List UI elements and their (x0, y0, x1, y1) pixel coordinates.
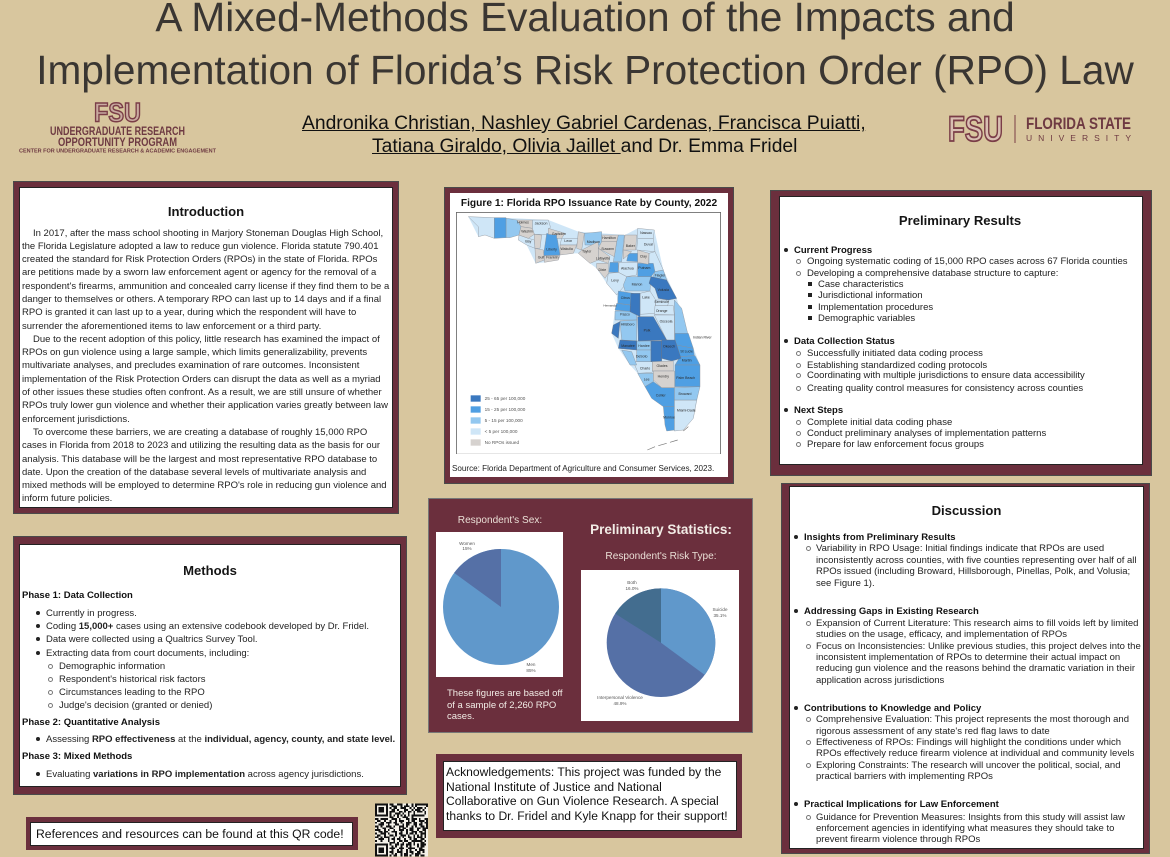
legend (471, 395, 526, 446)
panel: introduction (14, 182, 398, 513)
callout: references: References and resources can be found at this QR code! (36, 827, 344, 841)
list: practical implications for law enforcement (794, 798, 1125, 844)
title (36, 0, 1134, 93)
icon: QR code (375, 804, 428, 856)
county labels: Broward (678, 392, 692, 396)
text: phase 2: Phase 2: Quantitative Analysis (22, 716, 160, 728)
county labels: Gadsden (552, 232, 566, 236)
text: phase 3: Evaluating variations in RPO implementation across agency jurisdictions. (46, 768, 364, 780)
authors (302, 113, 866, 157)
list: data collection status: Creating quality control measures for consistency across counties (807, 382, 1083, 394)
list: data collection status: Data Collection Status (794, 336, 895, 346)
text: phase 1: Circumstances leading to the RPO (59, 686, 205, 698)
pie chart: respondent's sex: Women (459, 541, 475, 546)
county labels: St Lucie (680, 349, 693, 353)
county labels (517, 221, 712, 419)
county labels: Suwann (601, 247, 614, 251)
title: Implementation of Florida’s Risk Protection Order (RPO) Law (36, 47, 1134, 93)
county labels: Madison (587, 240, 600, 244)
list: insights from preliminary results: see Figure 1). (816, 578, 875, 588)
list: next steps: Complete initial data coding phase (807, 416, 952, 428)
county labels: Indian River (693, 336, 712, 340)
list: practical implications for law enforcement: prevent firearm violence through RPOs (816, 834, 980, 844)
text: phase 1: Currently in progress. (46, 608, 137, 618)
list: practical implications for law enforcement: Guidance for Prevention Measures: Insights from this study will assist law (816, 812, 1125, 822)
legend: No RPOs issued (485, 440, 519, 445)
list: next steps: Next Steps (794, 404, 843, 416)
list: insights from preliminary results: inconsistently across counties, with five counties representing over half of all (816, 554, 1137, 566)
heading: discussion: Discussion (932, 503, 1001, 518)
text: phase 1: Extracting data from court documents, including: (46, 648, 249, 658)
county labels: Hamilton (602, 236, 616, 240)
logo: FSU Undergraduate Research Opportunity Program (19, 98, 217, 155)
list: data collection status: Coordinating with multiple jurisdictions to ensure data accessibility (807, 370, 1085, 380)
list: practical implications for law enforcement: enforcement agencies in identifying what measures they should take to (816, 822, 1114, 834)
counties: 25 to 65 per 100,000 (612, 277, 681, 362)
list: addressing gaps in existing research: reducing gun violence and the reasons behind the dramatic variation in their (816, 662, 1135, 674)
state silhouette (468, 217, 700, 431)
logo: FSU Undergraduate Research Opportunity Program: CENTER FOR UNDERGRADUATE RESEARCH & ACADEMIC ENGAGEMENT (19, 149, 217, 155)
county labels: Duval (644, 243, 653, 247)
county labels: Palm Beach (676, 376, 695, 380)
county labels: Volusia (658, 288, 669, 292)
county labels: Orange (656, 309, 668, 313)
county labels: Martin (682, 359, 692, 363)
pie chart: respondent's risk type: 48.9% (613, 701, 627, 706)
florida keys (647, 427, 688, 450)
callout: references (26, 817, 358, 850)
heading: preliminary statistics: Preliminary Statistics: (590, 522, 732, 537)
county labels: Manatee (621, 344, 635, 348)
county labels: Monroe (663, 415, 675, 419)
list: addressing gaps in existing research: studies on the usage, efficacy, and implementation of RPOs (816, 628, 1067, 640)
county labels: DeSoto (636, 355, 648, 359)
list: current progress: Case characteristics (818, 278, 904, 290)
county labels: Jackson (535, 221, 547, 225)
text: phase 1: Demographic information (59, 660, 165, 672)
text: introduction body: In 2017, after the mass school shooting in Marjory Stoneman Douglas High School, the Florida Legislature adopted a law to reduce gun violence. Florida statute 790.401 created the standard for Risk Protection Orders (RPOs) in the state of Florida. RPOs are petitions made by a sworn law enforcement agent or agency for the removal of a respondent's firearms, ammunition and concealed carry license if they find them to be a danger to themselves or others. A temporary RPO can last up to 14 days and if a final RPO is granted it can last up to a year, during which the respondent will have to surrender the aforementioned items to law enforcement or a third party. Due to the recent adoption of this policy, little research has examined the impact of RPOs on gun violence using a large sample, which limits generalizability, prevents multivariate analyses, and precludes examination of rare outcomes. Inconsistent implementation of the Risk Protection Orders can disrupt the data as well as a myriad of other issues these studies often confront. As a result, we are still unsure of whether RPOs truly lower gun violence and whether their application varies greatly between law enforcement jurisdictions. To overcome these barriers, we are creating a database of roughly 15,000 RPO cases in Florida from 2018 to 2023 and utilizing the resulting data as the basis for our analysis. This database will be the largest and most representative RPO database to date. Upon the creation of the database several levels of multivariate analysis and mixed methods will be employed to determine RPO's role in reducing gun violence and inform future policies. (22, 228, 389, 504)
counties: 5 to 15 per 100,000 (506, 218, 700, 400)
list: current progress: Jurisdictional information (818, 290, 923, 300)
list: contributions to knowledge and policy: RPOs effectively reduce firearm violence at individual and community levels (816, 748, 1134, 758)
county labels: Hernando (603, 303, 617, 307)
list: insights from preliminary results: Insights from Preliminary Results (804, 532, 956, 542)
panel: methods (14, 537, 406, 794)
heading: preliminary results: Preliminary Results (899, 213, 1021, 228)
list: addressing gaps in existing research: Addressing Gaps in Existing Research (804, 606, 979, 616)
logo: FSU Undergraduate Research Opportunity Program: FSU (94, 98, 141, 128)
county labels: Miami-Dade (677, 409, 696, 413)
list: contributions to knowledge and policy: Comprehensive Evaluation: This project represents the most thorough and (816, 714, 1129, 724)
list: data collection status: Establishing standardized coding protocols (807, 360, 987, 370)
list: current progress: Demographic variables (818, 312, 915, 324)
text: phase 1: Coding 15,000+ cases using an extensive codebook developed by Dr. Fridel. (46, 620, 369, 632)
heading: introduction: Introduction (168, 204, 244, 219)
pie chart: respondent's sex: Men (527, 662, 536, 667)
pie chart: respondent's risk type: Interpersonal Violence (597, 695, 643, 700)
legend: 5 - 15 per 100,000 (485, 418, 523, 423)
logo: Florida State University: UNIVERSITY (1026, 133, 1131, 143)
heading: figure 1: Figure 1: Florida RPO Issuance Rate by County, 2022 (461, 198, 717, 208)
text: phase 1: Phase 1: Data Collection (22, 590, 133, 600)
list: contributions to knowledge and policy: Contributions to Knowledge and Policy (804, 702, 981, 714)
county labels: Hillsboro (621, 322, 635, 326)
list: addressing gaps in existing research: inconsistent implementation of RPOs to determine their actual impact on (816, 652, 1120, 662)
county labels: Collier (656, 394, 666, 398)
county labels: Washin (521, 230, 533, 234)
text: phase 1: Data were collected using a Qualtrics Survey Tool. (46, 634, 258, 644)
county labels: Nassau (640, 231, 652, 235)
list: data collection status: Successfully initiated data coding process (807, 348, 983, 358)
text: phase 1: Respondent's historical risk factors (59, 674, 206, 684)
list: data collection status (784, 336, 1085, 394)
counties: no RPOs issued (517, 220, 674, 388)
panel: discussion (782, 484, 1149, 853)
label: respondent's sex: Respondent's Sex: (458, 514, 542, 526)
list: insights from preliminary results: RPOs issued (including Broward, Hillsborough, Pinellas, Polk, and Volusia; (816, 566, 1130, 576)
county labels: Putnam (638, 266, 650, 270)
county labels: Pasco (620, 312, 630, 316)
list: addressing gaps in existing research: Focus on Inconsistencies: Unlike previous studies, this project delves into the (816, 640, 1141, 652)
callout: acknowledgements (436, 754, 742, 838)
county labels: Clay (640, 254, 647, 258)
text: phase 2: Assessing RPO effectiveness at the individual, agency, county, and state level. (46, 734, 395, 744)
legend: 15 - 25 per 100,000 (485, 407, 526, 412)
list: addressing gaps in existing research: application across jurisdictions (816, 674, 944, 686)
authors: Andronika Christian, Nashley Gabriel Cardenas, Francisca Puiatti, (302, 113, 866, 134)
county labels: Hardee (638, 344, 650, 348)
pie chart: respondent's risk type: 16.0% (625, 586, 639, 591)
panel: Florida map figure (445, 188, 733, 483)
county labels: Liberty (546, 248, 557, 252)
county labels: Holmes (517, 221, 529, 225)
county labels: Lafayette (596, 257, 610, 261)
choropleth map (456, 212, 721, 454)
list: next steps: Prepare for law enforcement focus groups (807, 438, 984, 450)
label: respondent's risk type: Respondent's Risk Type: (605, 550, 717, 562)
county labels: Baker (626, 244, 636, 248)
list: current progress (784, 244, 1128, 324)
list: current progress: Ongoing systematic coding of 15,000 RPO cases across 67 Florida counties (807, 256, 1128, 266)
county labels: Polk (644, 329, 651, 333)
county labels: Marion (632, 283, 642, 287)
county labels: Franklin (546, 255, 559, 259)
pie chart: respondent's risk type (581, 570, 739, 721)
logo: Florida State University (948, 110, 1131, 146)
panel: preliminary results (771, 191, 1151, 475)
pie chart: respondent's risk type: 35.1% (713, 613, 727, 618)
list: next steps (784, 404, 1046, 450)
county labels: Okeech (663, 344, 675, 348)
legend: < 5 per 100,000 (485, 429, 518, 434)
text: phase 2 (22, 716, 395, 744)
county labels: Wakulla (561, 247, 573, 251)
authors: Tatiana Giraldo, Olivia Jaillet and Dr. Emma Fridel (372, 136, 797, 157)
logo: FSU Undergraduate Research Opportunity Program: OPPORTUNITY PROGRAM (58, 135, 177, 149)
text: phase 3 (22, 750, 364, 780)
pie chart: respondent's sex: 15% (462, 546, 472, 551)
list: insights from preliminary results (794, 532, 1137, 588)
note: sample size: These figures are based off of a sample of 2,260 RPO cases. (447, 688, 562, 722)
pie chart: respondent's sex: 85% (526, 668, 536, 673)
county labels: Osceola (660, 320, 672, 324)
heading: methods: Methods (183, 563, 237, 578)
text: phase 1 (22, 590, 369, 710)
county labels: Leon (564, 239, 572, 243)
county labels: Alachua (621, 266, 634, 270)
county labels: Flagler (655, 273, 666, 277)
county labels: Hendry (658, 374, 669, 378)
counties: 15 to 25 per 100,000 (494, 218, 700, 431)
panel: preliminary statistics (429, 499, 752, 732)
county labels: Levy (611, 279, 619, 283)
text: phase 3: Phase 3: Mixed Methods (22, 750, 132, 762)
county labels: Seminole (654, 300, 669, 304)
county labels: Charlo (640, 366, 650, 370)
list: practical implications for law enforcement: Practical Implications for Law Enforcement (804, 798, 999, 810)
counties: under 5 per 100,000 (468, 217, 697, 431)
list: addressing gaps in existing research: Expansion of Current Literature: This research aims to fill voids left by limited (816, 618, 1138, 628)
county labels: Gulf (538, 255, 544, 259)
pie chart: respondent's risk type: Suicide (712, 607, 728, 612)
list: contributions to knowledge and policy (794, 702, 1134, 782)
list: current progress: Implementation procedures (818, 302, 933, 312)
pie chart: respondent's sex (436, 532, 563, 677)
list: contributions to knowledge and policy: practical barriers with implementing RPOs (816, 770, 993, 782)
list: current progress: Current Progress (794, 244, 872, 256)
callout: acknowledgements: Acknowledgements: This project was funded by the National Institute of Justice and National Collaborative on Gun Violence Research. A special thanks to Dr. Fridel and Kyle Knapp for their support! (446, 765, 728, 823)
list: addressing gaps in existing research (794, 606, 1141, 686)
list: contributions to knowledge and policy: Exploring Constraints: The research will uncover the political, social, and (816, 760, 1121, 770)
legend: 25 - 65 per 100,000 (485, 396, 526, 401)
list: current progress: Developing a comprehensive database structure to capture: (807, 268, 1058, 278)
county labels: Glades (656, 364, 668, 368)
county labels: Dixie (598, 268, 606, 272)
county labels: Lake (642, 295, 650, 299)
list: next steps: Conduct preliminary analyses of implementation patterns (807, 428, 1046, 438)
pie chart: respondent's risk type: Both (627, 580, 637, 585)
list: contributions to knowledge and policy: Effectiveness of RPOs: Findings will highlight the conditions under which (816, 736, 1121, 748)
list: contributions to knowledge and policy: rigorous assessment of any state's red flag laws to date (816, 726, 1050, 736)
text: phase 1: Judge's decision (granted or denied) (59, 700, 212, 710)
county labels: Citrus (621, 296, 630, 300)
source note: Source: Florida Department of Agriculture and Consumer Services, 2023. (452, 464, 714, 473)
list: insights from preliminary results: Variability in RPO Usage: Initial findings indicate that RPOs are used (816, 542, 1104, 554)
county labels: Taylor (582, 250, 592, 254)
county labels: Bay (525, 239, 532, 243)
county labels: Lee (644, 377, 650, 381)
